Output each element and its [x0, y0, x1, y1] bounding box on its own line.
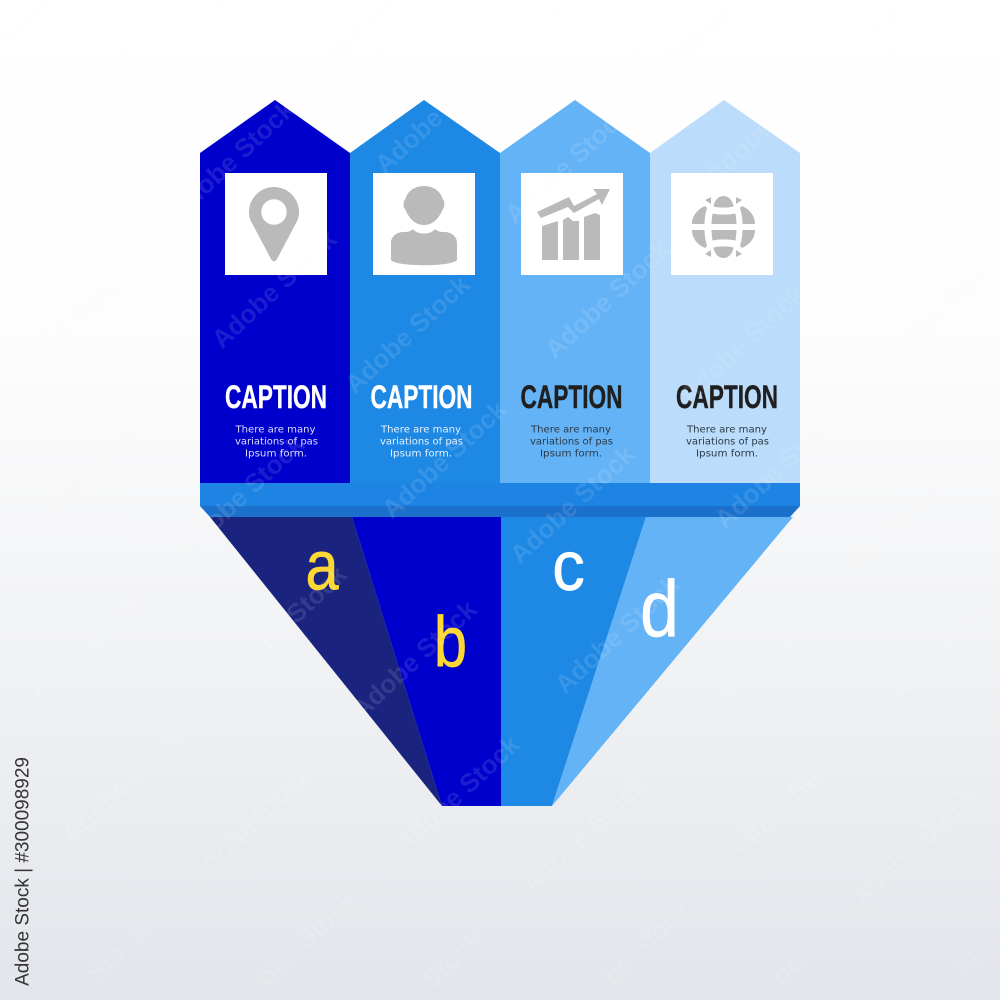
letter d: d — [640, 564, 679, 654]
watermark pattern: ock — [766, 938, 819, 990]
watermark pattern: Stock — [416, 924, 488, 994]
watermark pattern: Adobe Stock — [174, 429, 311, 559]
letter a: a — [305, 526, 339, 605]
watermark pattern: Adobe Stock — [717, 737, 854, 867]
watermark pattern: Adobe Stock — [376, 394, 513, 524]
body text 1 — [234, 424, 318, 460]
watermark pattern: Adobe Stock — [12, 589, 149, 719]
watermark pattern: Adobe Stock — [504, 439, 641, 569]
horizontal band — [200, 483, 800, 517]
watermark pattern: Adobe Stock — [846, 781, 983, 911]
body text 3: variations of pas — [530, 436, 613, 448]
watermark pattern: Adobe Stock — [681, 606, 818, 736]
watermark pattern: Stock — [81, 918, 153, 988]
watermark pattern: be Stock — [597, 894, 697, 990]
letter c: c — [552, 528, 585, 606]
watermark pattern: Adobe Stock — [549, 569, 686, 699]
body text 4: variations of pas — [686, 436, 769, 448]
watermark pattern: Adobe Sto — [882, 596, 997, 706]
caption 3: CAPTION — [520, 379, 622, 415]
body text 2 — [380, 424, 463, 460]
watermark pattern: Adobe Stock — [56, 719, 193, 849]
body text 3: Ipsum form. — [540, 448, 602, 460]
watermark pattern: Adobe Stock — [182, 759, 319, 889]
stock id label: Adobe Stock | #300098929 — [12, 757, 34, 986]
watermark pattern: Adobe Stock — [389, 729, 526, 859]
body text 2: There are many — [380, 424, 461, 436]
watermark pattern: Adobe Stock — [206, 224, 343, 354]
watermark pattern: Adobe Stock — [46, 384, 183, 514]
panel: column 1 — [200, 100, 350, 483]
watermark pattern: Adobe Stock — [699, 59, 836, 189]
watermark pattern: Ad — [862, 0, 907, 44]
body text 4 — [686, 424, 769, 460]
caption 1: CAPTION — [225, 379, 327, 415]
icon: location pin — [249, 187, 299, 261]
watermark pattern: Adobe Stock — [674, 279, 811, 409]
body text 1: variations of pas — [235, 436, 318, 448]
panel: column 4 — [650, 100, 800, 483]
watermark pattern: Adobe Stock — [369, 49, 506, 179]
icon: globe — [692, 196, 755, 258]
watermark pattern: Adobe Stock — [0, 259, 136, 389]
icon: growth chart — [537, 189, 610, 260]
watermark pattern: Adobe Stock — [709, 404, 846, 534]
funnel segment c — [501, 517, 646, 806]
funnel segment b — [352, 517, 501, 806]
caption 4: CAPTION — [676, 379, 778, 415]
panel: column 3 — [500, 100, 650, 483]
funnel segment d — [552, 517, 793, 806]
letter b: b — [434, 603, 467, 682]
watermark pattern: Adobe Stock — [216, 559, 353, 689]
body text 1: There are many — [234, 424, 316, 436]
watermark pattern: Adobe Stock — [516, 769, 653, 899]
watermark pattern: Adobe Stock — [41, 51, 178, 181]
panel: column 2 — [350, 100, 500, 483]
watermark pattern: Adobe Stoc — [872, 254, 998, 374]
watermark pattern: Adobe Stock — [826, 114, 963, 244]
body text 3 — [530, 424, 613, 460]
watermark pattern: Adobe Stock — [346, 594, 483, 724]
funnel segment a — [210, 517, 442, 806]
body text 4: There are many — [686, 424, 767, 436]
body text 3: There are many — [530, 424, 611, 436]
body text 2: variations of pas — [380, 436, 463, 448]
watermark pattern: Adobe Stock — [499, 99, 636, 229]
watermark pattern: Adobe Stock — [836, 449, 973, 579]
caption 2: CAPTION — [370, 379, 472, 415]
body text 1: Ipsum form. — [245, 448, 307, 460]
icon: person — [391, 186, 457, 265]
watermark pattern: Adobe Stock — [539, 234, 676, 364]
watermark pattern: obe Stock — [251, 884, 362, 991]
body text 2: Ipsum form. — [390, 448, 452, 460]
watermark pattern: St — [946, 941, 985, 981]
watermark pattern: Adobe Stock — [339, 269, 476, 399]
watermark pattern: Adobe Stock — [164, 94, 301, 224]
body text 4: Ipsum form. — [696, 448, 758, 460]
